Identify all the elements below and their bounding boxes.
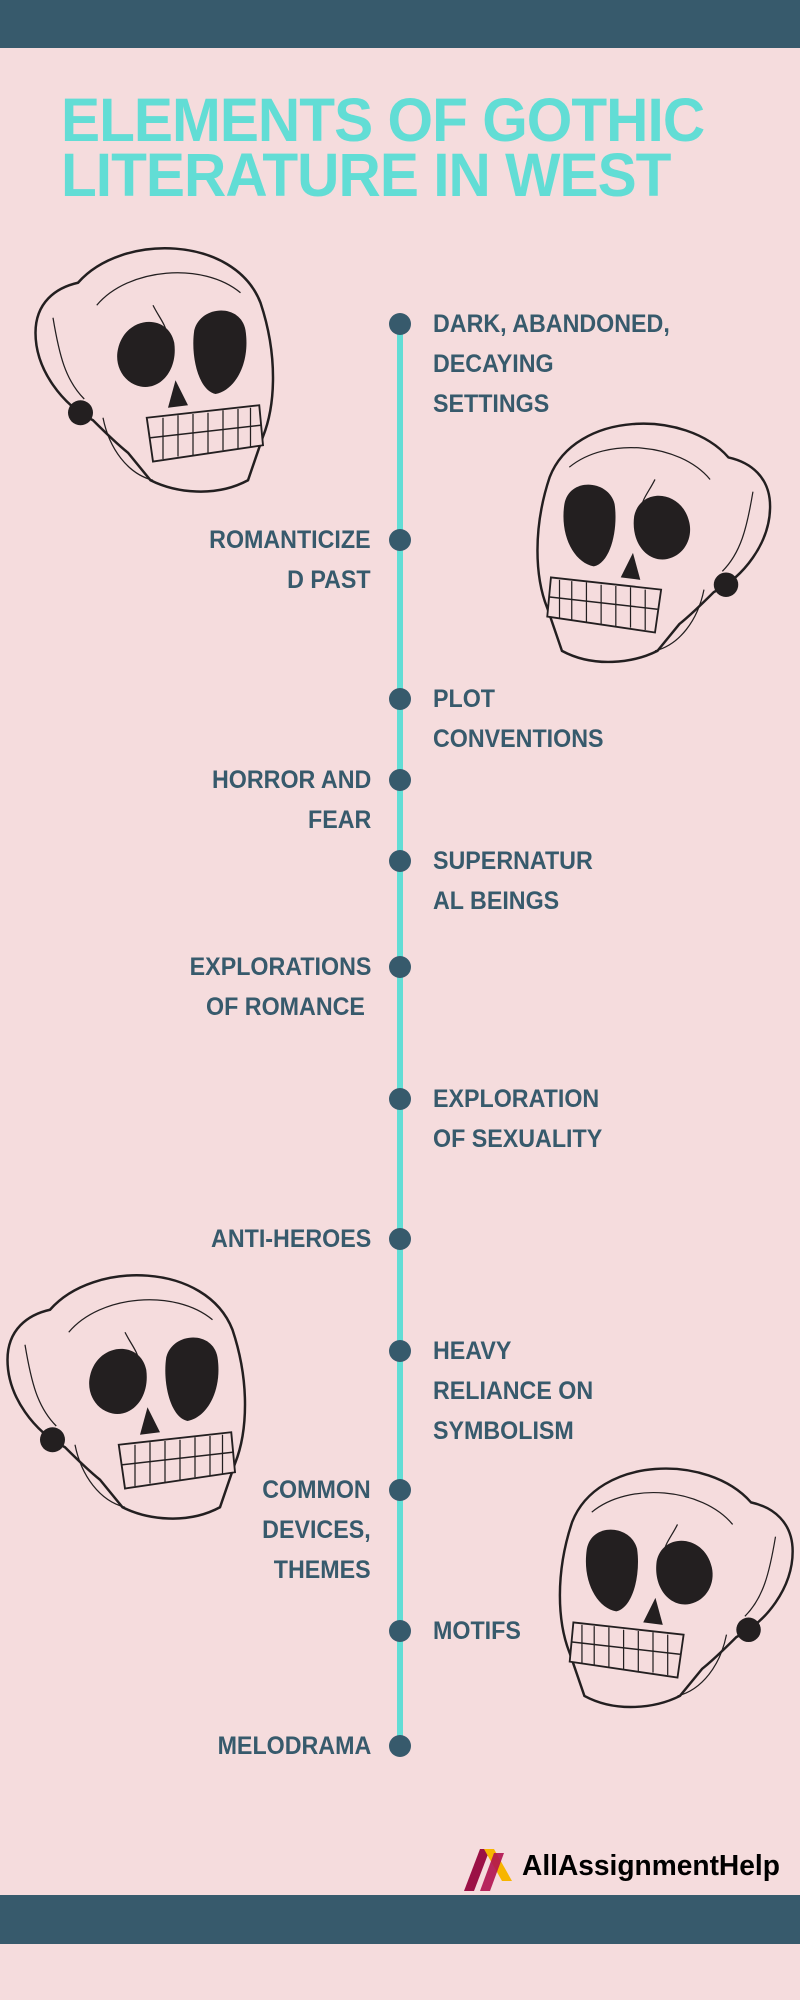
- skull illustration bottom-right: [558, 1467, 794, 1708]
- timeline item: supernatural beings: [389, 847, 593, 915]
- text: ROMANTICIZE: [210, 526, 371, 554]
- timeline item: common devices: [262, 1476, 411, 1584]
- skull illustration bottom-left: [6, 1274, 246, 1520]
- text: DARK, ABANDONED,: [433, 310, 670, 338]
- skull illustration top-left: [34, 247, 274, 493]
- timeline item: motifs: [389, 1617, 521, 1645]
- text: OF ROMANCE: [206, 993, 365, 1021]
- top bar: [0, 0, 800, 48]
- text: FEAR: [308, 806, 371, 834]
- title: LITERATURE IN WEST: [61, 141, 670, 209]
- text: AL BEINGS: [433, 887, 559, 915]
- text: EXPLORATION: [433, 1085, 599, 1113]
- bottom bar: [0, 1895, 800, 1944]
- timeline item: explorations of romance: [189, 953, 411, 1021]
- text: DECAYING: [433, 350, 554, 378]
- timeline item: melodrama: [217, 1732, 411, 1760]
- timeline item: plot conventions: [389, 685, 604, 753]
- text: ANTI-HEROES: [211, 1225, 371, 1253]
- text: MELODRAMA: [217, 1732, 371, 1760]
- text: DEVICES,: [262, 1516, 371, 1544]
- timeline item: dark settings: [389, 310, 670, 418]
- skull illustration right: [536, 422, 772, 664]
- timeline line: [397, 324, 403, 1746]
- text: PLOT: [433, 685, 495, 713]
- text: THEMES: [274, 1556, 371, 1584]
- timeline item: anti-heroes: [211, 1225, 411, 1253]
- timeline item: romanticized past: [210, 526, 411, 594]
- text: SUPERNATUR: [433, 847, 593, 875]
- text: RELIANCE ON: [433, 1377, 593, 1405]
- timeline item: exploration of sexuality: [389, 1085, 602, 1153]
- text: CONVENTIONS: [433, 725, 604, 753]
- text: SETTINGS: [433, 390, 549, 418]
- text: COMMON: [263, 1476, 371, 1504]
- text: EXPLORATIONS: [189, 953, 371, 981]
- text: HEAVY: [433, 1337, 511, 1365]
- text: MOTIFS: [433, 1617, 521, 1645]
- title: [61, 86, 704, 209]
- text: D PAST: [287, 566, 371, 594]
- timeline item: symbolism: [389, 1337, 593, 1445]
- text: HORROR AND: [212, 766, 371, 794]
- logo: [464, 1849, 780, 1891]
- logo text: AllAssignmentHelp: [522, 1850, 780, 1882]
- timeline item: horror and fear: [212, 766, 411, 834]
- icon: logo mark: [464, 1849, 512, 1891]
- text: OF SEXUALITY: [433, 1125, 602, 1153]
- title: ELEMENTS OF GOTHIC: [61, 86, 704, 154]
- text: SYMBOLISM: [433, 1417, 574, 1445]
